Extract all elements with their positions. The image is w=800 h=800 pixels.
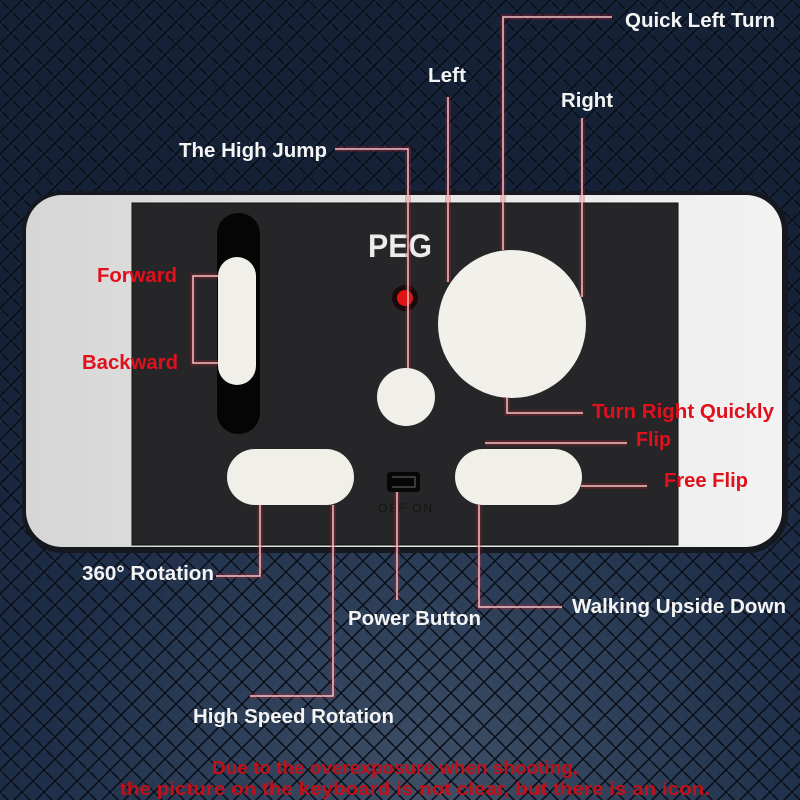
label: 360 degree Rotation <box>82 505 260 585</box>
slider track <box>217 213 260 434</box>
label: The High Jump <box>179 140 408 368</box>
label: Right: Right <box>561 90 613 112</box>
label: High Speed Rotation: High Speed Rotation <box>193 706 394 728</box>
panel: black faceplate <box>132 203 678 545</box>
label: Free Flip: Free Flip <box>664 470 748 492</box>
label: The High Jump: The High Jump <box>179 140 327 162</box>
label: Left: Left <box>428 65 466 87</box>
label: Quick Left Turn: Quick Left Turn <box>625 10 775 32</box>
high jump round button <box>377 368 435 426</box>
label: Forward and Backward: Forward <box>97 265 177 287</box>
label: Walking Upside Down <box>479 505 786 618</box>
left pill button <box>227 449 354 505</box>
label: Forward and Backward <box>82 265 218 374</box>
label: Power Button: Power Button <box>348 608 481 630</box>
label: High Speed Rotation <box>193 505 394 728</box>
panel: controller body <box>22 191 788 553</box>
label: Power Button <box>348 492 481 630</box>
power switch: OFF ON <box>378 501 432 515</box>
label: Turn Right Quickly <box>507 397 775 423</box>
logo: PEG: PEG <box>368 228 432 264</box>
large directional pad <box>438 250 586 398</box>
footnote <box>120 758 710 799</box>
footnote: Due to the overexposure when shooting, <box>212 758 578 778</box>
label: Walking Upside Down: Walking Upside Down <box>572 596 786 618</box>
forward and backward slider button <box>218 257 256 385</box>
right pill button <box>455 449 582 505</box>
label: Flip: Flip <box>636 429 671 451</box>
label: Forward and Backward: Backward <box>82 352 178 374</box>
label: 360 degree Rotation: 360° Rotation <box>82 563 214 585</box>
label: Turn Right Quickly: Turn Right Quickly <box>592 401 775 423</box>
label: Quick Left Turn <box>503 10 775 250</box>
footnote: the picture on the keyboard is not clear, but there is an icon. <box>120 779 710 799</box>
power switch <box>378 472 432 515</box>
indicator light <box>392 285 418 311</box>
